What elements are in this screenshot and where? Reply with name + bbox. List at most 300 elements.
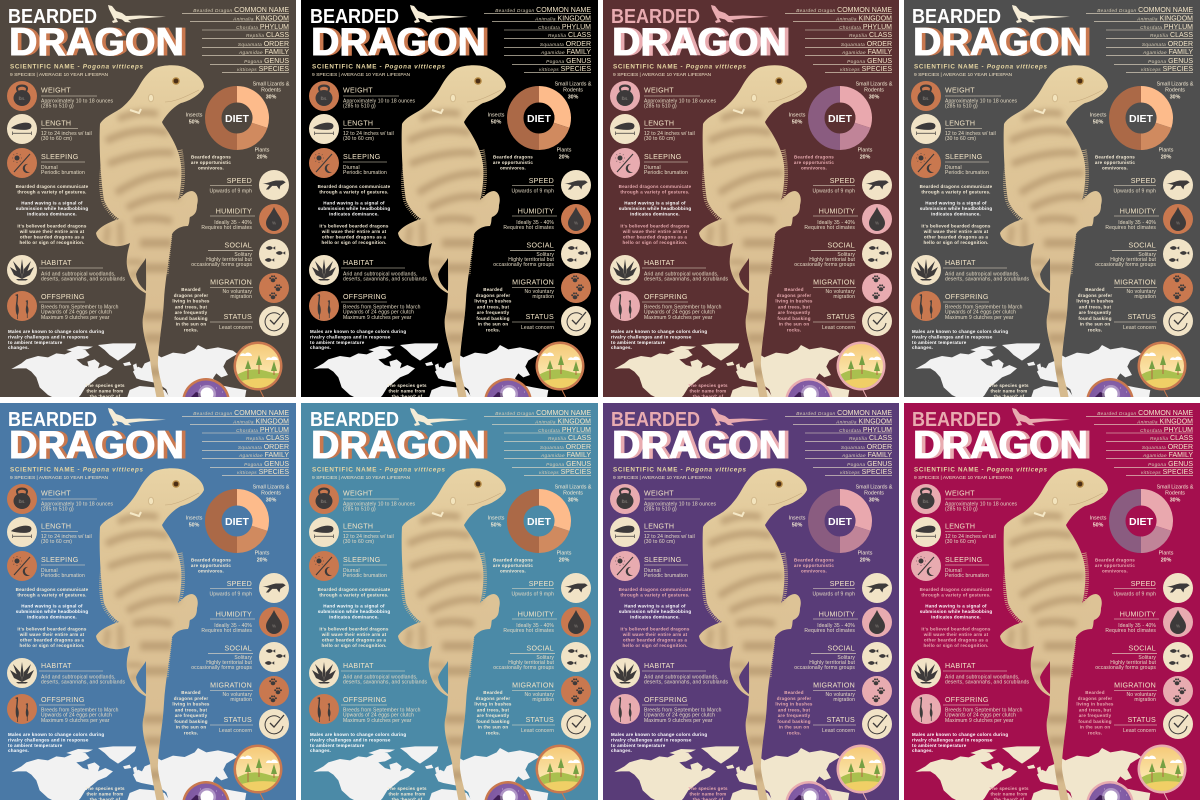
- taxonomy list: Animalia KINGDOM: [1136, 418, 1193, 426]
- basking text: in the sun on: [478, 322, 508, 326]
- gestures text: through a variety of gestures.: [620, 190, 690, 195]
- social: occasionally forms groups: [794, 665, 855, 671]
- scientific name: [10, 64, 143, 78]
- species name text: their name from: [990, 792, 1028, 797]
- habitat: deserts, savannahs, and scrublands: [343, 276, 428, 282]
- taxonomy list: vitticeps SPECIES: [539, 469, 591, 476]
- diet donut chart: Plants: [1159, 148, 1173, 154]
- basking text: and trees, but: [477, 304, 509, 309]
- diet caption: omnivores.: [500, 166, 526, 170]
- offspring: Upwards of 24 eggs per clutch: [41, 713, 112, 719]
- colour change text: to ambient temperature: [611, 743, 666, 748]
- humidity: HUMIDITY: [819, 208, 855, 216]
- habitat: HABITAT: [644, 259, 675, 267]
- basking text: Bearded: [483, 287, 503, 292]
- diet donut chart: Small Lizards &: [253, 484, 289, 490]
- colour change text: Males are known to change colors during: [611, 329, 707, 334]
- offspring: Breeds from September to March: [644, 708, 722, 714]
- offspring: Breeds from September to March: [343, 708, 421, 714]
- gestures text: Hand waving is a signal of: [925, 200, 987, 206]
- panel: brown variant: [0, 0, 296, 397]
- gestures text: [318, 184, 391, 245]
- diet caption: are opportunistic: [794, 160, 834, 165]
- diet caption: omnivores.: [198, 568, 224, 574]
- scientific name: 9 SPECIES | AVERAGE 10 YEAR LIFESPAN: [312, 72, 410, 78]
- taxonomy list: Squamata ORDER: [841, 444, 892, 451]
- colour change text: rivalry challenges and in response: [8, 334, 89, 339]
- humidity: %: [875, 624, 879, 628]
- species name text: their name from: [388, 389, 426, 394]
- social: Solitary: [1138, 252, 1156, 258]
- basking text: and trees, but: [1079, 304, 1111, 309]
- sleeping: Diurnal: [945, 165, 962, 171]
- diet caption: omnivores.: [801, 568, 827, 574]
- taxonomy list: Bearded Dragon COMMON NAME: [796, 7, 892, 14]
- lizard illustration: [699, 468, 807, 800]
- taxonomy list: Chordata PHYLUM: [236, 427, 289, 434]
- offspring: [309, 291, 421, 321]
- basking text: Bearded: [1085, 287, 1105, 292]
- moon circle: [785, 781, 833, 800]
- diet donut chart: 20%: [257, 154, 268, 160]
- title: DRAGON: [612, 424, 787, 467]
- basking text: living in bushes: [1076, 702, 1114, 706]
- taxonomy list: Pogona GENUS: [847, 58, 892, 65]
- taxonomy list: vitticeps SPECIES: [1141, 66, 1193, 73]
- social: SOCIAL: [1128, 644, 1156, 652]
- title: BEARDED: [8, 409, 97, 431]
- title: BEARDED: [611, 6, 700, 28]
- moon circle: [1086, 781, 1134, 800]
- social: Highly territorial but: [1110, 257, 1156, 263]
- diet caption: Bearded dragons: [1095, 154, 1135, 160]
- humidity: Ideally 35 - 40%: [214, 623, 252, 629]
- sleeping: Diurnal: [41, 568, 58, 574]
- gestures text: will wave their entire arm at: [923, 632, 989, 637]
- scientific name: 9 SPECIES | AVERAGE 10 YEAR LIFESPAN: [613, 475, 711, 481]
- taxonomy list: Animalia KINGDOM: [534, 16, 591, 22]
- offspring: Maximum 9 clutches per year: [945, 718, 1014, 724]
- diet donut chart: Rodents: [261, 88, 281, 94]
- basking text: found basking: [777, 719, 811, 724]
- offspring: [7, 291, 119, 321]
- taxonomy list: Pogona GENUS: [1148, 58, 1193, 65]
- basking text: living in bushes: [474, 702, 512, 706]
- taxonomy list: Chordata PHYLUM: [538, 427, 591, 434]
- diet donut chart: [488, 82, 592, 160]
- basking text: dragons prefer: [1078, 696, 1112, 701]
- basking text: found basking: [476, 316, 510, 321]
- length: (30 to 60 cm): [41, 136, 72, 142]
- diet donut chart: 20%: [257, 558, 268, 564]
- diet donut chart: 20%: [860, 154, 871, 160]
- social: Solitary: [536, 252, 554, 258]
- diet donut chart: Small Lizards &: [253, 82, 289, 88]
- weight: WEIGHT: [41, 86, 71, 94]
- humidity: %: [875, 220, 879, 226]
- migration: [512, 273, 591, 303]
- colour change text: to ambient temperature: [8, 743, 63, 748]
- habitat: [7, 658, 126, 688]
- social: Solitary: [234, 655, 252, 661]
- basking text: and trees, but: [778, 707, 810, 712]
- basking text: in the sun on: [478, 724, 508, 730]
- diet donut chart: 50%: [1093, 120, 1104, 126]
- offspring: Upwards of 24 eggs per clutch: [945, 310, 1016, 316]
- taxonomy list: Pogona GENUS: [546, 58, 591, 65]
- sleeping: Periodic brumation: [945, 573, 989, 579]
- gestures text: through a variety of gestures.: [921, 190, 991, 195]
- humidity: %: [574, 220, 578, 226]
- taxonomy list: Squamata ORDER: [238, 444, 289, 451]
- basking text: in the sun on: [176, 724, 206, 730]
- gestures text: Hand waving is a signal of: [925, 604, 987, 608]
- title: DRAGON: [13, 424, 188, 467]
- basking text: dragons prefer: [476, 293, 510, 298]
- weight: Approximately 10 to 18 ounces: [41, 98, 113, 104]
- world map: [915, 343, 1150, 400]
- habitat: HABITAT: [41, 662, 72, 670]
- migration: No voluntary: [825, 289, 855, 295]
- humidity: [804, 204, 892, 234]
- length: LENGTH: [945, 120, 975, 128]
- basking text: rocks.: [486, 327, 500, 332]
- speed: Upwards of 9 mph: [1114, 188, 1156, 194]
- taxonomy list: Pogona GENUS: [244, 58, 289, 65]
- diet donut chart: Plants: [858, 550, 872, 556]
- migration: MIGRATION: [1114, 278, 1156, 286]
- weight: (285 to 510 g): [41, 103, 74, 109]
- social: SOCIAL: [224, 644, 252, 652]
- habitat: HABITAT: [945, 259, 976, 267]
- world map: [11, 746, 246, 800]
- social: occasionally forms groups: [493, 262, 554, 268]
- taxonomy list: Chordata PHYLUM: [839, 24, 892, 31]
- taxonomy list: Bearded Dragon COMMON NAME: [1097, 7, 1193, 14]
- scientific name: SCIENTIFIC NAME - Pogona vitticeps: [914, 64, 1047, 70]
- basking text: dragons prefer: [476, 696, 510, 701]
- gestures text: submission while headbobbing: [16, 609, 88, 614]
- taxonomy list: Reptilia CLASS: [246, 32, 289, 39]
- title: BEARDED: [611, 409, 700, 431]
- colour change text: to ambient temperature: [310, 743, 365, 748]
- humidity: Requires hot climates: [1105, 225, 1156, 231]
- humidity: Ideally 35 - 40%: [817, 623, 855, 629]
- taxonomy list: Squamata ORDER: [540, 41, 591, 48]
- taxonomy list: vitticeps SPECIES: [840, 469, 892, 476]
- gestures text: will wave their entire arm at: [923, 229, 989, 234]
- offspring: [610, 291, 722, 321]
- humidity: %: [1176, 220, 1180, 226]
- habitat: [7, 255, 126, 285]
- diet donut chart: Plants: [557, 148, 571, 154]
- title: DRAGON: [917, 21, 1092, 64]
- moon circle: [785, 378, 833, 426]
- taxonomy list: vitticeps SPECIES: [840, 66, 892, 73]
- migration: MIGRATION: [512, 682, 554, 690]
- basking text: Bearded: [181, 690, 201, 695]
- social: [493, 239, 591, 269]
- sleeping: [911, 148, 989, 178]
- social: Solitary: [234, 252, 252, 258]
- offspring: Upwards of 24 eggs per clutch: [41, 310, 112, 316]
- title: BEARDED: [310, 6, 399, 28]
- landscape circle: [1138, 342, 1186, 398]
- length: [911, 517, 996, 547]
- gestures text: Hand waving is a signal of: [21, 200, 83, 206]
- taxonomy list: Squamata ORDER: [238, 41, 289, 48]
- gestures text: [619, 184, 692, 245]
- diet donut chart: Small Lizards &: [856, 82, 892, 88]
- scientific name: [312, 64, 445, 78]
- diet donut chart: Insects: [488, 112, 504, 118]
- gestures text: Bearded dragons communicate: [16, 184, 88, 189]
- basking text: living in bushes: [172, 298, 210, 304]
- colour change text: changes.: [310, 345, 331, 350]
- offspring: Maximum 9 clutches per year: [644, 315, 713, 321]
- speed: SPEED: [1131, 177, 1156, 185]
- basking text: and trees, but: [477, 707, 509, 712]
- scientific name: 9 SPECIES | AVERAGE 10 YEAR LIFESPAN: [10, 72, 108, 78]
- gestures text: [619, 587, 692, 648]
- speed: SPEED: [529, 177, 554, 185]
- weight: WEIGHT: [41, 490, 71, 498]
- title: DRAGON: [616, 424, 791, 467]
- taxonomy list: Reptilia CLASS: [246, 435, 289, 442]
- landscape circle: [1138, 744, 1186, 800]
- taxonomy list: Reptilia CLASS: [548, 435, 591, 442]
- humidity: [201, 607, 289, 637]
- length: 12 to 24 inches w/ tail: [644, 131, 695, 137]
- gestures text: Hand waving is a signal of: [323, 200, 385, 206]
- sleeping: SLEEPING: [945, 153, 982, 161]
- weight: Approximately 10 to 18 ounces: [644, 501, 716, 507]
- social: occasionally forms groups: [493, 665, 554, 671]
- sleeping: Diurnal: [343, 165, 360, 171]
- diet donut chart: Rodents: [864, 490, 884, 496]
- colour change text: Males are known to change colors during: [912, 329, 1008, 334]
- gestures text: other bearded dragons as a: [924, 638, 988, 642]
- species name text: The species gets: [688, 383, 728, 388]
- length: 12 to 24 inches w/ tail: [644, 534, 695, 540]
- social: occasionally forms groups: [1095, 262, 1156, 268]
- colour change text: Males are known to change colors during: [8, 329, 104, 334]
- social: occasionally forms groups: [794, 262, 855, 268]
- colour change text: to ambient temperature: [310, 340, 365, 345]
- colour change text: changes.: [912, 345, 933, 350]
- diet caption: are opportunistic: [191, 563, 231, 568]
- weight: lbs.: [923, 499, 929, 504]
- weight: [610, 484, 717, 514]
- diet donut chart: 50%: [491, 522, 502, 528]
- taxonomy list: Squamata ORDER: [1142, 444, 1193, 451]
- panel: maroon variant: [603, 0, 899, 397]
- diet donut chart: 20%: [559, 154, 570, 160]
- taxonomy list: vitticeps SPECIES: [237, 66, 289, 73]
- diet caption: are opportunistic: [493, 160, 533, 165]
- gestures text: indicates dominance.: [329, 212, 379, 217]
- social: SOCIAL: [827, 644, 855, 652]
- diet donut chart: Rodents: [1165, 490, 1185, 496]
- migration: MIGRATION: [1114, 682, 1156, 690]
- sleeping: Diurnal: [644, 568, 661, 574]
- social: [1095, 642, 1193, 672]
- gestures text: It's believed bearded dragons: [319, 223, 389, 228]
- social: [1095, 239, 1193, 269]
- gestures text: through a variety of gestures.: [319, 190, 389, 195]
- diet donut chart: Small Lizards &: [555, 484, 591, 490]
- offspring: [911, 291, 1023, 321]
- diet caption: Bearded dragons: [794, 154, 834, 160]
- taxonomy list: Chordata PHYLUM: [1140, 427, 1193, 434]
- diet donut chart: [789, 484, 893, 564]
- diet donut chart: Insects: [488, 516, 504, 522]
- diet donut chart: Insects: [1090, 516, 1106, 522]
- length: [7, 517, 92, 547]
- moon circle: [484, 781, 532, 800]
- taxonomy list: [1086, 7, 1193, 73]
- diet donut chart: 30%: [568, 498, 579, 504]
- title: DRAGON: [9, 21, 184, 64]
- lizard illustration: [1000, 468, 1108, 800]
- basking text: rocks.: [184, 327, 198, 332]
- migration: No voluntary: [825, 692, 855, 698]
- lizard illustration: [96, 65, 204, 400]
- status: [1114, 306, 1193, 336]
- offspring: Maximum 9 clutches per year: [343, 718, 412, 724]
- offspring: Breeds from September to March: [945, 708, 1023, 714]
- offspring: Upwards of 24 eggs per clutch: [644, 713, 715, 719]
- scientific name: 9 SPECIES | AVERAGE 10 YEAR LIFESPAN: [10, 475, 108, 481]
- colour change text: rivalry challenges and in response: [310, 737, 391, 742]
- gestures text: through a variety of gestures.: [17, 593, 87, 598]
- gestures text: Hand waving is a signal of: [624, 604, 686, 608]
- species name text: their name from: [689, 792, 727, 797]
- humidity: Ideally 35 - 40%: [516, 220, 554, 226]
- social: Solitary: [1138, 655, 1156, 661]
- taxonomy list: Agamidae FAMILY: [238, 49, 289, 56]
- social: [191, 642, 289, 672]
- status: Least concern: [521, 728, 554, 734]
- taxonomy list: Reptilia CLASS: [1150, 435, 1193, 442]
- scientific name: SCIENTIFIC NAME - Pogona vitticeps: [613, 64, 746, 70]
- diet donut chart: DIET: [225, 113, 250, 125]
- taxonomy list: Reptilia CLASS: [849, 435, 892, 442]
- basking text: dragons prefer: [777, 696, 811, 701]
- humidity: [804, 607, 892, 637]
- status: Least concern: [521, 325, 554, 331]
- basking text: Bearded: [784, 690, 804, 695]
- offspring: OFFSPRING: [343, 696, 387, 704]
- gestures text: will wave their entire arm at: [622, 632, 688, 637]
- speed: Upwards of 9 mph: [210, 188, 252, 194]
- status: STATUS: [1128, 313, 1156, 321]
- title: DRAGON: [913, 424, 1088, 467]
- length: (30 to 60 cm): [343, 136, 374, 142]
- taxonomy list: Agamidae FAMILY: [841, 452, 892, 459]
- habitat: HABITAT: [644, 662, 675, 670]
- offspring: Maximum 9 clutches per year: [343, 315, 412, 321]
- sleeping: Diurnal: [945, 568, 962, 574]
- colour change text: rivalry challenges and in response: [310, 334, 391, 339]
- icon: small lizard: [1012, 5, 1070, 23]
- colour change text: rivalry challenges and in response: [611, 334, 692, 339]
- offspring: Breeds from September to March: [644, 304, 722, 310]
- species name text: their name from: [689, 389, 727, 394]
- title: DRAGON: [315, 424, 490, 467]
- habitat: HABITAT: [945, 662, 976, 670]
- weight: lbs.: [622, 499, 628, 504]
- offspring: Maximum 9 clutches per year: [644, 718, 713, 724]
- sleeping: [309, 551, 387, 581]
- length: [610, 517, 695, 547]
- taxonomy list: Chordata PHYLUM: [538, 24, 591, 31]
- colour change text: rivalry challenges and in response: [912, 334, 993, 339]
- habitat: Arid and subtropical woodlands,: [945, 271, 1020, 277]
- status: Least concern: [219, 728, 252, 734]
- diet donut chart: Insects: [186, 112, 202, 118]
- migration: No voluntary: [222, 692, 252, 698]
- sleeping: SLEEPING: [945, 556, 982, 564]
- gestures text: through a variety of gestures.: [620, 593, 690, 598]
- sleeping: Periodic brumation: [41, 573, 85, 579]
- diet donut chart: DIET: [828, 113, 853, 125]
- scientific name: SCIENTIFIC NAME - Pogona vitticeps: [613, 466, 746, 474]
- taxonomy list: Agamidae FAMILY: [841, 49, 892, 56]
- title: BEARDED: [912, 6, 1001, 28]
- sleeping: SLEEPING: [343, 556, 380, 564]
- migration: migration: [1134, 697, 1156, 703]
- taxonomy list: Pogona GENUS: [546, 461, 591, 468]
- migration: migration: [833, 697, 855, 703]
- diet donut chart: Plants: [858, 148, 872, 154]
- offspring: OFFSPRING: [644, 293, 688, 301]
- species name text: their name from: [86, 792, 124, 797]
- length: LENGTH: [945, 522, 975, 530]
- humidity: %: [272, 624, 276, 628]
- weight: lbs.: [321, 499, 327, 504]
- taxonomy list: Bearded Dragon COMMON NAME: [193, 410, 289, 417]
- gestures text: indicates dominance.: [27, 615, 77, 620]
- humidity: %: [1176, 624, 1180, 628]
- speed: Upwards of 9 mph: [210, 591, 252, 597]
- diet caption: Bearded dragons: [191, 154, 231, 160]
- diet donut chart: Insects: [186, 516, 202, 522]
- offspring: Upwards of 24 eggs per clutch: [644, 310, 715, 316]
- social: Highly territorial but: [206, 257, 252, 263]
- sleeping: SLEEPING: [644, 153, 681, 161]
- sleeping: Diurnal: [41, 165, 58, 171]
- gestures text: hello or sign of recognition.: [19, 240, 85, 245]
- weight: WEIGHT: [343, 86, 373, 94]
- migration: migration: [230, 697, 252, 703]
- colour change text: changes.: [8, 748, 29, 753]
- gestures text: will wave their entire arm at: [321, 632, 387, 637]
- species name text: The species gets: [688, 786, 728, 791]
- basking text: in the sun on: [1080, 322, 1110, 326]
- taxonomy list: Bearded Dragon COMMON NAME: [495, 410, 591, 417]
- social: SOCIAL: [224, 242, 252, 250]
- habitat: HABITAT: [343, 662, 374, 670]
- status: STATUS: [224, 716, 252, 724]
- diet donut chart: [1090, 484, 1194, 564]
- basking text: found basking: [174, 719, 208, 724]
- gestures text: It's believed bearded dragons: [620, 626, 690, 631]
- taxonomy list: Reptilia CLASS: [548, 32, 591, 39]
- taxonomy list: Agamidae FAMILY: [1142, 452, 1193, 459]
- gestures text: submission while headbobbing: [920, 609, 992, 614]
- moon circle: [484, 378, 532, 426]
